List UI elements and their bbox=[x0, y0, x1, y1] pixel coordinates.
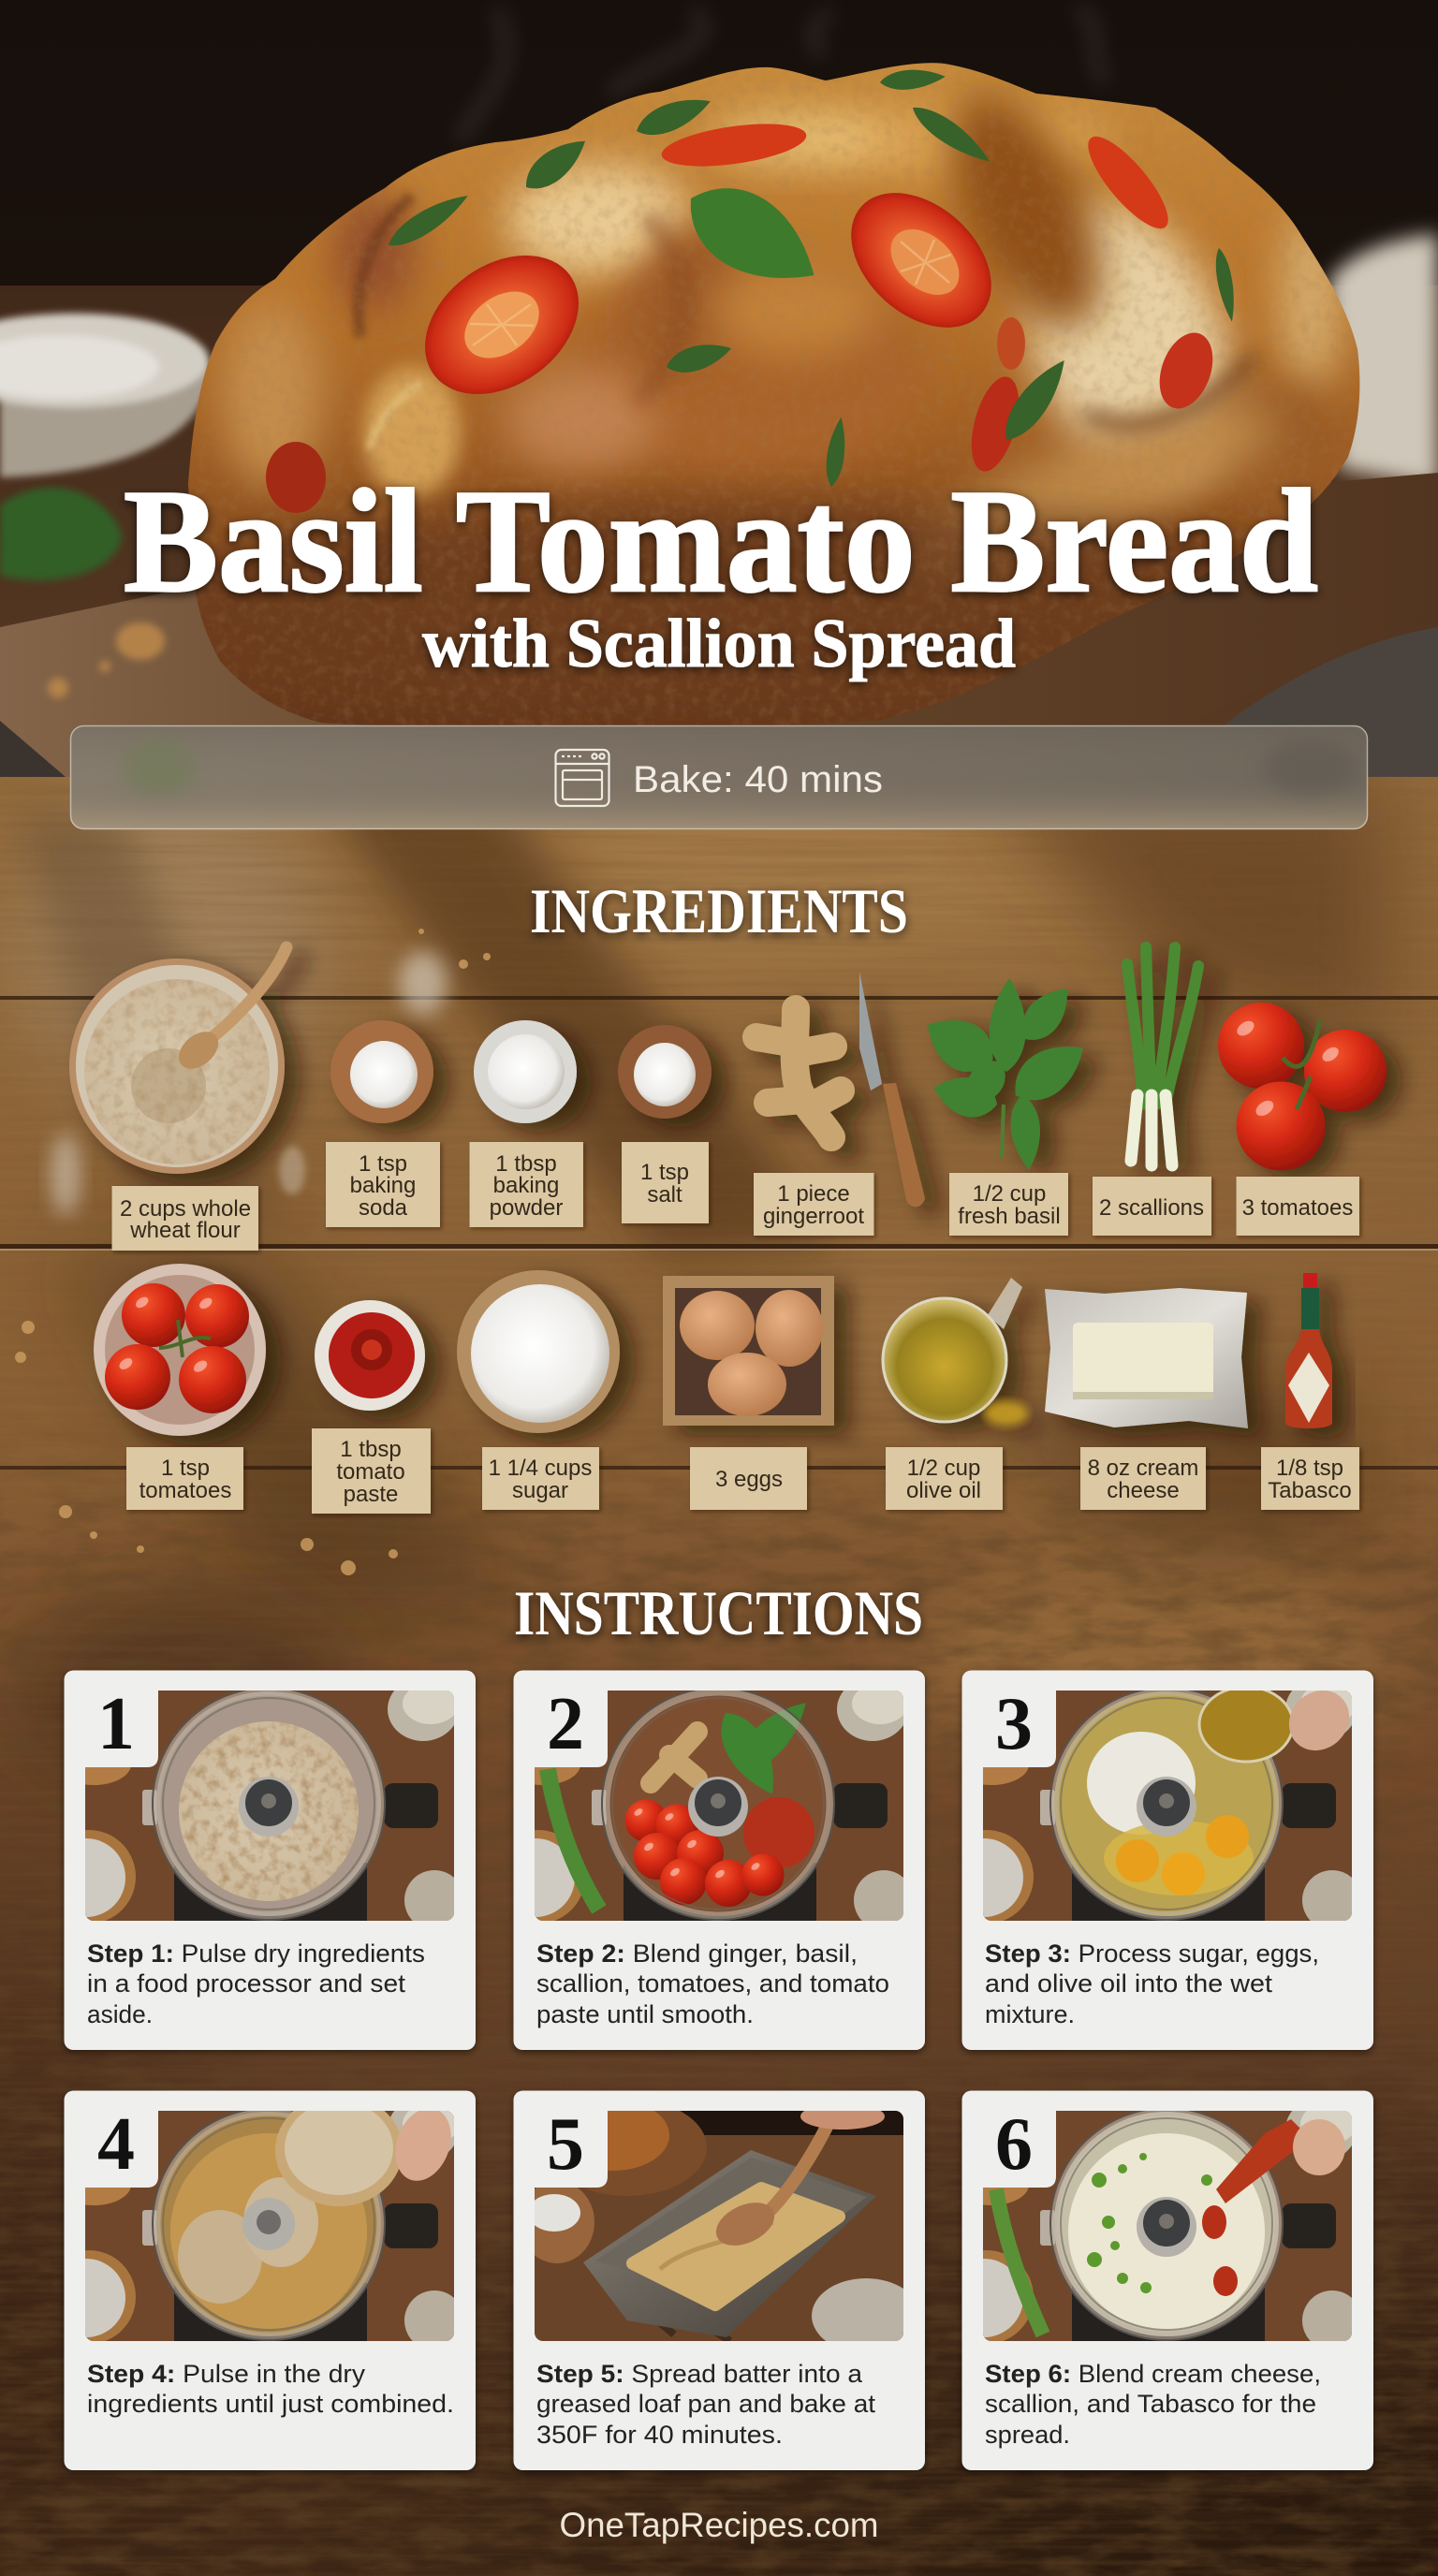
label: sugar: 1 1/4 cups bbox=[489, 1456, 592, 1481]
label: tomato paste: 1 tbsp bbox=[340, 1437, 402, 1462]
step 3 number bbox=[983, 1683, 1056, 1767]
subtitle: with Scallion Spread bbox=[422, 606, 1016, 682]
label: gingerroot: 1 piece bbox=[777, 1181, 850, 1207]
label: baking soda: baking bbox=[350, 1173, 416, 1198]
label: baking powder: powder bbox=[490, 1195, 563, 1221]
label: Tabasco bbox=[1261, 1447, 1359, 1510]
label: salt: salt bbox=[647, 1182, 682, 1208]
grey cloth right bbox=[1225, 627, 1438, 777]
step 1 text: aside. bbox=[87, 2000, 153, 2028]
step 5 photo bbox=[520, 2099, 920, 2353]
label: flour bbox=[112, 1186, 258, 1251]
wood background bbox=[0, 768, 1438, 2576]
label: 3 tomatoes: 3 tomatoes bbox=[1242, 1195, 1353, 1221]
label: 1 tsp tomatoes: tomatoes bbox=[139, 1478, 231, 1503]
label: eggs bbox=[690, 1447, 807, 1510]
basil leaves small bbox=[383, 66, 1240, 488]
icon: basil bbox=[916, 977, 1095, 1171]
step 2 text: Step 2: Blend ginger, basil, bbox=[536, 1939, 858, 1968]
step 1 text: Step 1: Pulse dry ingredients bbox=[87, 1939, 425, 1968]
step 6 text: spread. bbox=[985, 2421, 1070, 2449]
label: gingerroot: gingerroot bbox=[763, 1204, 864, 1229]
icon: scallions bbox=[1127, 947, 1198, 1165]
label: baking powder: 1 tbsp bbox=[495, 1151, 557, 1177]
label: baking soda: soda bbox=[359, 1195, 408, 1221]
step 4 photo bbox=[42, 2094, 464, 2350]
label: flour: wheat flour bbox=[129, 1218, 241, 1243]
label: salt bbox=[622, 1142, 709, 1223]
label: gingerroot bbox=[754, 1173, 874, 1236]
icon: sugar bowl bbox=[457, 1270, 620, 1433]
label: basil bbox=[949, 1173, 1068, 1236]
step 2 text: paste until smooth. bbox=[536, 2000, 754, 2028]
label: basil: fresh basil bbox=[958, 1204, 1061, 1229]
icon: Tabasco bottle bbox=[1285, 1273, 1332, 1428]
step 1 text: in a food processor and set bbox=[87, 1969, 406, 1998]
step 6 text: scallion, and Tabasco for the bbox=[985, 2390, 1316, 2418]
title: Basil Tomato Bread bbox=[124, 460, 1318, 623]
dark cloth left bbox=[0, 721, 66, 777]
basil leaf large bbox=[671, 166, 834, 307]
step 2 text: scallion, tomatoes, and tomato bbox=[536, 1969, 889, 1998]
step 6 photo bbox=[940, 2098, 1362, 2350]
label: tomato paste bbox=[312, 1428, 431, 1514]
step 4 number bbox=[85, 2103, 158, 2188]
ingredients row 1 bbox=[69, 947, 1387, 1207]
label: tomato paste: paste bbox=[344, 1482, 398, 1507]
step 6 text bbox=[985, 2360, 1321, 2449]
tomato slices upper bbox=[266, 116, 1223, 513]
panel: step 3 bbox=[940, 1670, 1373, 2050]
panel: step 6 bbox=[940, 2091, 1373, 2470]
bake time bar bbox=[70, 725, 1368, 829]
icon: three tomatoes bbox=[1218, 1003, 1387, 1170]
icon: bowl of tomatoes bbox=[94, 1264, 266, 1436]
label: Tabasco: 1/8 tsp bbox=[1276, 1456, 1343, 1481]
instructions heading: INSTRUCTIONS bbox=[514, 1577, 923, 1648]
step 1 photo bbox=[42, 1677, 464, 1930]
tomato slice right bbox=[825, 166, 1018, 355]
tomato slice main bbox=[399, 227, 605, 423]
step 2 number bbox=[535, 1683, 608, 1767]
hero photo: bread on cutting board bbox=[0, 0, 1438, 777]
label: baking soda bbox=[326, 1142, 440, 1227]
icon: tomato paste bowl bbox=[315, 1300, 425, 1411]
cutting board bbox=[0, 473, 1438, 777]
label: baking powder: baking bbox=[493, 1173, 559, 1198]
label: cream cheese: cheese bbox=[1107, 1478, 1180, 1503]
step 4 text bbox=[87, 2360, 454, 2418]
label: 1 tsp tomatoes: 1 tsp bbox=[161, 1456, 210, 1481]
label: cream cheese: 8 oz cream bbox=[1088, 1456, 1198, 1481]
step 5 text bbox=[536, 2360, 876, 2449]
icon: cream cheese on foil bbox=[1045, 1288, 1248, 1428]
step 3 text: mixture. bbox=[985, 2000, 1075, 2028]
label: Tabasco: Tabasco bbox=[1268, 1478, 1352, 1503]
panel: step 5 bbox=[513, 2091, 925, 2470]
label: scallions bbox=[1093, 1177, 1211, 1236]
icon: oven bbox=[556, 750, 609, 806]
label: flour: 2 cups whole bbox=[120, 1196, 251, 1222]
step 2 photo bbox=[492, 1677, 914, 1930]
step 3 text bbox=[985, 1939, 1319, 2028]
label: baking powder bbox=[470, 1142, 583, 1227]
label: cream cheese bbox=[1080, 1447, 1206, 1510]
icon: baking powder bowl bbox=[474, 1020, 577, 1123]
footer: OneTapRecipes.com bbox=[560, 2506, 878, 2544]
label: sugar bbox=[482, 1447, 599, 1510]
ingredients row 2 bbox=[94, 1264, 1332, 1436]
step 4 text: ingredients until just combined. bbox=[87, 2390, 454, 2418]
icon: eggs in crate bbox=[663, 1276, 834, 1426]
step 1 number: 1 bbox=[97, 1683, 135, 1765]
bake text: Bake: 40 mins bbox=[633, 759, 883, 800]
panel: step 1 bbox=[42, 1670, 476, 2050]
step 5 text: Step 5: Spread batter into a bbox=[536, 2360, 863, 2388]
label: salt: 1 tsp bbox=[640, 1160, 689, 1185]
cloth background right bbox=[1329, 234, 1438, 487]
label: sugar: sugar bbox=[512, 1478, 568, 1503]
step 3 photo bbox=[940, 1677, 1362, 1930]
step 6 number bbox=[983, 2103, 1056, 2188]
step 3 number: 3 bbox=[995, 1683, 1033, 1765]
white bowl left bbox=[0, 314, 211, 477]
step 5 number: 5 bbox=[547, 2103, 584, 2186]
step 1 number bbox=[85, 1683, 158, 1767]
label: baking soda: 1 tsp bbox=[359, 1151, 407, 1177]
step 1 text bbox=[87, 1939, 425, 2028]
ingredient labels bbox=[112, 1142, 1359, 1514]
panel: step 4 bbox=[42, 2091, 476, 2470]
icon: flour bowl with spoon bbox=[69, 947, 286, 1174]
step 6 text: Step 6: Blend cream cheese, bbox=[985, 2360, 1321, 2388]
step 5 text: greased loaf pan and bake at bbox=[536, 2390, 876, 2418]
icon: olive oil cup bbox=[883, 1278, 1027, 1425]
step 4 number: 4 bbox=[97, 2103, 135, 2186]
step 2 text bbox=[536, 1939, 889, 2028]
step 5 text: 350F for 40 minutes. bbox=[536, 2421, 783, 2449]
step 3 text: and olive oil into the wet bbox=[985, 1969, 1273, 1998]
label: olive oil: 1/2 cup bbox=[907, 1456, 980, 1481]
step 6 number: 6 bbox=[995, 2103, 1033, 2186]
label: scallions: 2 scallions bbox=[1099, 1195, 1204, 1221]
basil leaf left bbox=[0, 488, 122, 580]
step 3 text: Step 3: Process sugar, eggs, bbox=[985, 1939, 1319, 1968]
steam bbox=[459, 9, 1105, 140]
icon: knife bbox=[859, 972, 925, 1207]
icon: ginger bbox=[756, 1009, 841, 1137]
ingredients heading: INGREDIENTS bbox=[530, 875, 908, 946]
label: olive oil bbox=[886, 1447, 1003, 1510]
panel: step 2 bbox=[492, 1670, 925, 2050]
step 2 number: 2 bbox=[547, 1683, 584, 1765]
label: 3 tomatoes bbox=[1236, 1177, 1359, 1236]
icon: salt bowl bbox=[618, 1025, 712, 1119]
label: 1 tsp tomatoes bbox=[126, 1447, 243, 1510]
icon: baking soda bowl bbox=[330, 1020, 433, 1123]
loaf bbox=[140, 56, 1376, 739]
label: basil: 1/2 cup bbox=[973, 1181, 1046, 1207]
step 4 text: Step 4: Pulse in the dry bbox=[87, 2360, 366, 2388]
step 5 number bbox=[535, 2103, 608, 2188]
label: olive oil: olive oil bbox=[906, 1478, 981, 1503]
crumbs bbox=[48, 622, 165, 698]
label: tomato paste: tomato bbox=[336, 1459, 405, 1485]
label: eggs: 3 eggs bbox=[715, 1467, 783, 1492]
